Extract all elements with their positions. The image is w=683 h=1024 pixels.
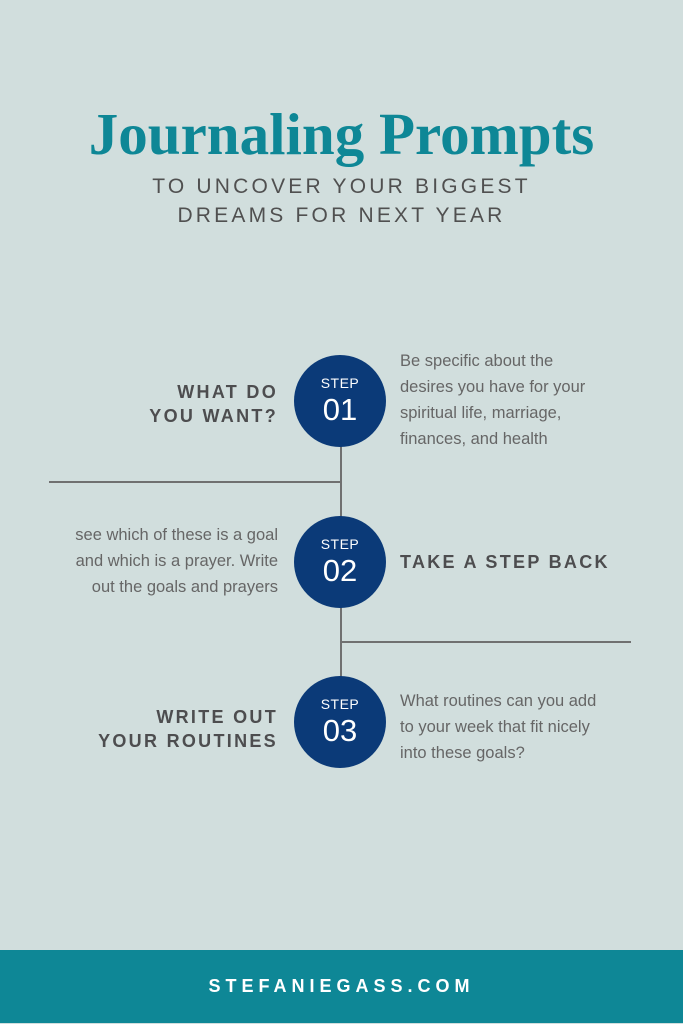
step 3 text: What routines can you add — [400, 692, 596, 710]
step 3 circle — [294, 676, 386, 768]
step 3 heading — [98, 707, 278, 751]
subtitle: TO UNCOVER YOUR BIGGEST — [152, 175, 531, 198]
step 1 text: spiritual life, marriage, — [400, 404, 561, 422]
step 1 text: desires you have for your — [400, 378, 585, 396]
step 3 text: to your week that fit nicely — [400, 718, 590, 736]
footer — [0, 950, 683, 1023]
step 1 circle: STEP — [321, 375, 359, 391]
step 1 text: finances, and health — [400, 430, 548, 448]
step 3 circle: 03 — [323, 713, 357, 748]
step 1 heading: WHAT DO — [177, 382, 278, 402]
subtitle: DREAMS FOR NEXT YEAR — [177, 204, 506, 227]
step 3 heading: YOUR ROUTINES — [98, 731, 278, 751]
step 2 text: see which of these is a goal — [75, 526, 278, 544]
footer: STEFANIEGASS.COM — [208, 976, 475, 996]
step 2 text: out the goals and prayers — [92, 578, 278, 596]
step 3 text — [400, 692, 596, 762]
step 2 text — [75, 526, 278, 596]
step 1 text — [400, 352, 585, 448]
step 2 circle: 02 — [323, 553, 357, 588]
step 3 heading: WRITE OUT — [156, 707, 278, 727]
step 2 text: and which is a prayer. Write — [76, 552, 278, 570]
title: Journaling Prompts — [89, 101, 594, 167]
step 2 circle — [294, 516, 386, 608]
step 2 heading: TAKE A STEP BACK — [400, 552, 610, 572]
step 2 circle: STEP — [321, 536, 359, 552]
step 1 circle — [294, 355, 386, 447]
step 1 circle: 01 — [323, 392, 357, 427]
step 1 heading — [149, 382, 278, 426]
step 3 circle: STEP — [321, 696, 359, 712]
step 1 heading: YOU WANT? — [149, 406, 278, 426]
step 1 text: Be specific about the — [400, 352, 553, 370]
step 3 text: into these goals? — [400, 744, 525, 762]
subtitle — [152, 175, 531, 227]
